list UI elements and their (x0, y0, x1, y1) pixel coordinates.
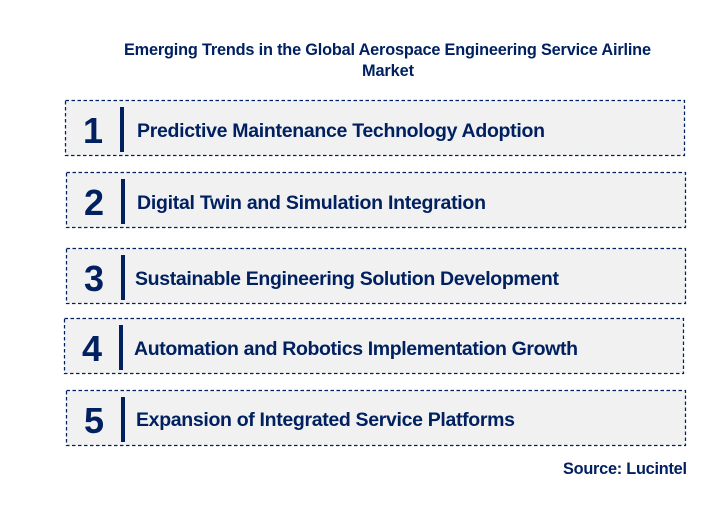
panel: trend 2 (66, 172, 686, 228)
number 4: 4 (82, 328, 102, 369)
label 5: Expansion of Integrated Service Platforms (136, 409, 515, 431)
number 1: 1 (83, 110, 103, 151)
panel: trend 3 (66, 248, 686, 304)
divider bar 4 (119, 325, 123, 370)
panel: trend 1 (66, 100, 684, 156)
divider bar 1 (120, 107, 124, 152)
divider bar 5 (121, 397, 125, 442)
panel: trend 4 (64, 318, 684, 374)
label 4: Automation and Robotics Implementation Growth (134, 338, 578, 360)
panel: trend 5 (66, 390, 686, 446)
title (124, 41, 651, 80)
title: Market (362, 62, 415, 80)
number 5: 5 (84, 400, 104, 441)
number 2: 2 (84, 182, 104, 223)
title: Emerging Trends in the Global Aerospace Engineering Service Airline (124, 41, 651, 59)
label 3: Sustainable Engineering Solution Development (135, 268, 560, 290)
divider bar 2 (121, 179, 125, 224)
source note: Source: Lucintel (563, 460, 687, 478)
label 1: Predictive Maintenance Technology Adoption (137, 120, 545, 142)
divider bar 3 (121, 255, 125, 300)
label 2: Digital Twin and Simulation Integration (137, 192, 486, 214)
number 3: 3 (84, 258, 104, 299)
